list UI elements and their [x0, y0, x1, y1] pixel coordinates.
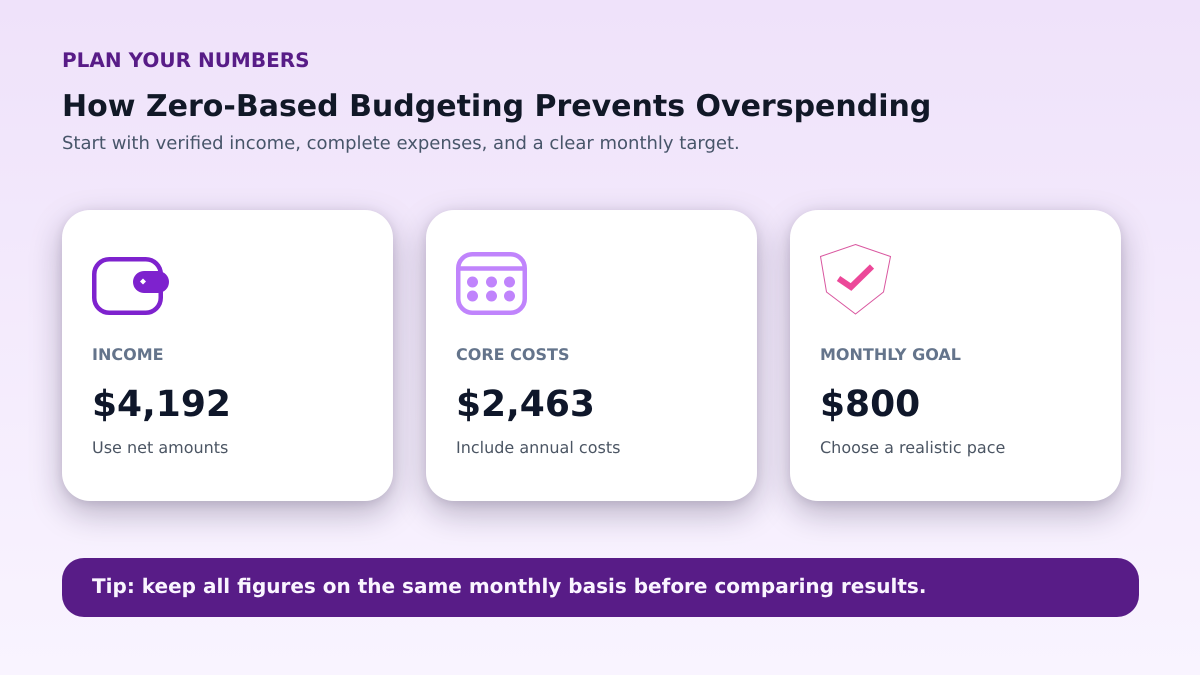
- icon: wallet: [92, 257, 169, 315]
- tip banner: [62, 558, 1139, 617]
- title: How Zero-Based Budgeting Prevents Overspending: [62, 89, 931, 124]
- panel: core costs: [426, 210, 757, 501]
- note: income: Use net amounts: [92, 438, 228, 457]
- label: income: INCOME: [92, 345, 164, 364]
- label: core costs: CORE COSTS: [456, 345, 569, 364]
- value: monthly goal: $800: [820, 384, 920, 425]
- eyebrow heading: PLAN YOUR NUMBERS: [62, 48, 310, 72]
- value: income: $4,192: [92, 384, 231, 425]
- note: monthly goal: Choose a realistic pace: [820, 438, 1005, 457]
- panel: income: [62, 210, 393, 501]
- panel: monthly goal: [790, 210, 1121, 501]
- value: core costs: $2,463: [456, 384, 595, 425]
- label: monthly goal: MONTHLY GOAL: [820, 345, 961, 364]
- icon: calendar: [456, 252, 527, 315]
- note: core costs: Include annual costs: [456, 438, 620, 457]
- subtitle: Start with verified income, complete expenses, and a clear monthly target.: [62, 133, 740, 154]
- icon: shield check: [820, 244, 892, 314]
- tip text: Tip: keep all figures on the same monthly basis before comparing results.: [92, 574, 926, 598]
